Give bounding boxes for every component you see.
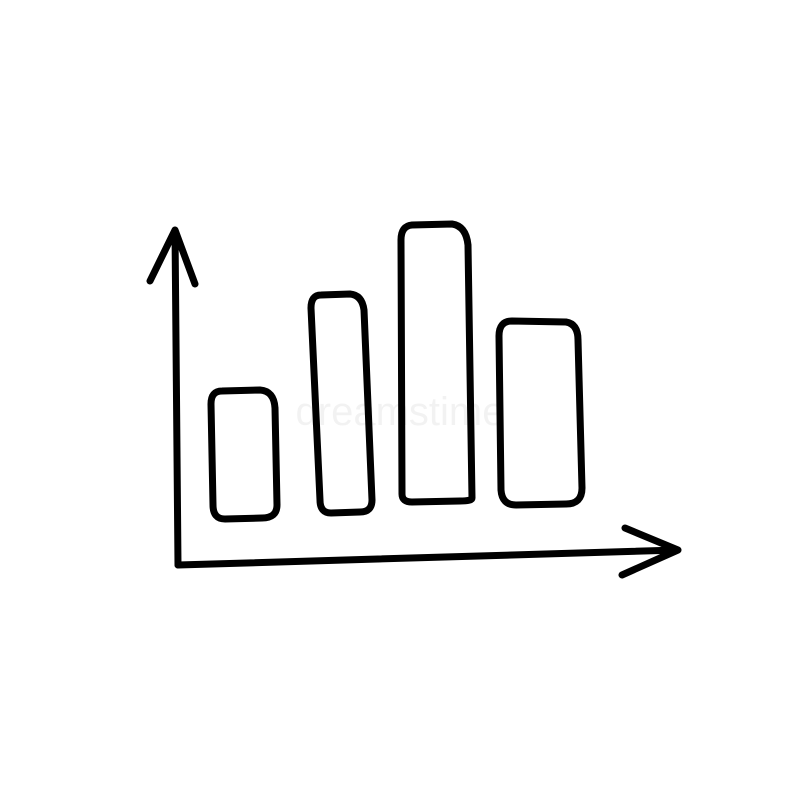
bar 4 <box>499 321 582 505</box>
bar 1 <box>211 390 277 519</box>
bar chart <box>150 224 678 575</box>
bar 2 <box>311 294 372 513</box>
x axis with arrow <box>178 528 678 575</box>
y axis with arrow <box>150 230 195 565</box>
bar 3 <box>401 224 472 502</box>
watermark text: dreamstime <box>296 390 504 434</box>
